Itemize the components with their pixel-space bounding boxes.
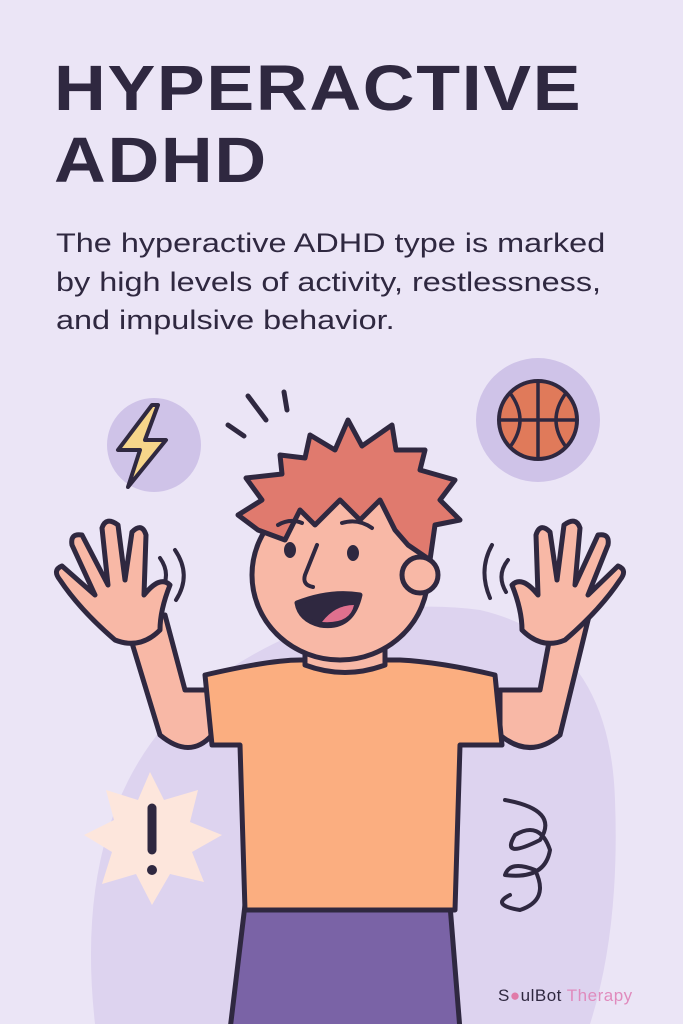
icon: lightning circle bbox=[107, 398, 201, 492]
boy: shirt bbox=[205, 660, 502, 910]
icon: basketball bbox=[476, 358, 600, 482]
icon: exclamation burst bbox=[84, 772, 222, 905]
subtitle text: The hyperactive ADHD type is marked bbox=[56, 228, 605, 258]
subtitle text: by high levels of activity, restlessness, bbox=[56, 266, 601, 296]
head bbox=[238, 420, 460, 660]
subtitle text: and impulsive behavior. bbox=[56, 305, 395, 335]
neck bbox=[305, 620, 385, 672]
background blob bbox=[91, 607, 616, 1024]
title: HYPERACTIVE bbox=[54, 52, 582, 124]
motion lines bbox=[160, 392, 508, 600]
boy: arms bbox=[56, 521, 624, 748]
hands bbox=[56, 521, 170, 643]
logo: S●ulBot Therapy bbox=[498, 986, 633, 1005]
boy: pants bbox=[230, 905, 460, 1024]
icon: spring squiggle bbox=[502, 800, 550, 910]
title: ADHD bbox=[54, 124, 268, 196]
title bbox=[54, 52, 582, 196]
subtitle text bbox=[56, 228, 605, 335]
